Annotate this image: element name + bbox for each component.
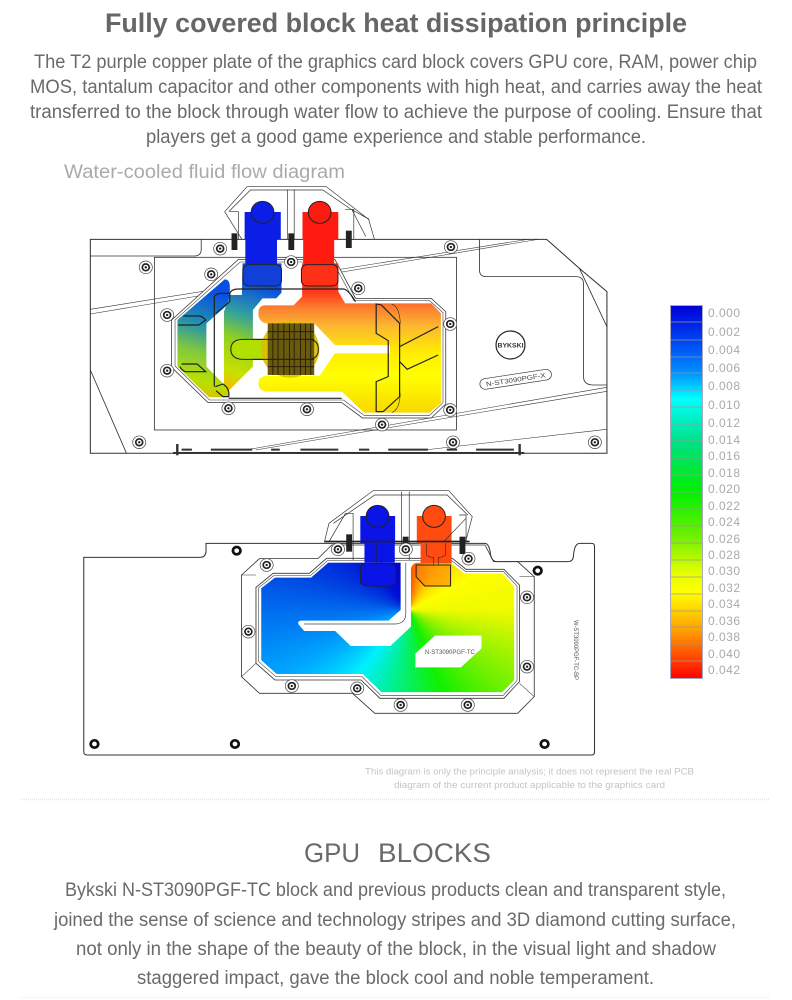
side model marking: W-ST3090PGF-TC-BP	[572, 620, 579, 680]
legend labels: 0.016	[708, 449, 741, 463]
brand logo	[496, 331, 525, 359]
card outline	[84, 543, 595, 755]
inlet connector: blue	[360, 505, 396, 586]
section paragraph: joined the sense of science and technology stripes and 3D diamond cutting surface,	[53, 910, 736, 931]
bottom bracket	[173, 444, 524, 455]
terminal bolts	[325, 534, 470, 554]
legend labels: 0.012	[708, 416, 741, 430]
legend labels: 0.028	[708, 548, 741, 562]
legend labels: 0.030	[708, 564, 741, 578]
fluid region	[261, 562, 514, 692]
screws	[133, 241, 601, 449]
title: Fully covered block heat dissipation principle	[105, 8, 687, 38]
screws	[91, 543, 548, 748]
section paragraph	[53, 880, 736, 989]
footnote: This diagram is only the principle analysis; it does not represent the real PCB	[365, 766, 694, 776]
footnote	[365, 766, 694, 790]
legend labels: 0.024	[708, 515, 741, 529]
slot line	[304, 563, 406, 624]
legend labels: 0.010	[708, 398, 741, 412]
legend color bar	[670, 306, 702, 678]
outlet connector: red	[301, 201, 338, 286]
intro paragraph	[30, 52, 763, 148]
brand logo: BYKSKI	[498, 343, 524, 350]
legend labels: 0.020	[708, 482, 741, 496]
legend labels: 0.038	[708, 630, 741, 644]
section paragraph: staggered impact, gave the block cool and noble temperament.	[137, 968, 654, 989]
section paragraph: not only in the shape of the beauty of the block, in the visual light and shadow	[76, 939, 716, 960]
card outline	[90, 239, 607, 453]
legend labels: 0.036	[708, 614, 741, 628]
center nub and fins	[231, 321, 319, 378]
fluid right channel	[258, 263, 441, 413]
outlet connector: orange	[416, 505, 452, 586]
footnote: diagram of the current product applicable to the graphics card	[394, 780, 665, 790]
legend labels: 0.002	[708, 325, 741, 339]
section heading	[304, 838, 491, 868]
legend labels: 0.000	[708, 306, 741, 320]
gasket outline	[242, 545, 534, 713]
legend labels: 0.014	[708, 433, 741, 447]
legend labels: 0.040	[708, 647, 741, 661]
legend labels: 0.022	[708, 499, 741, 513]
intro paragraph: The T2 purple copper plate of the graphics card block covers GPU core, RAM, power chip	[34, 52, 757, 73]
model plate	[479, 369, 552, 390]
gasket outline	[172, 259, 446, 418]
model plate: N-ST3090PGF-X	[486, 372, 547, 388]
fluid left channel	[177, 279, 230, 397]
diagram: back of block flow	[84, 491, 595, 755]
legend labels: 0.042	[708, 663, 741, 677]
block internal outlines	[178, 289, 438, 413]
inlet connector: blue	[243, 201, 281, 286]
intro paragraph: MOS, tantalum capacitor and other components with high heat, and carries away the heat	[30, 77, 763, 98]
legend labels: 0.018	[708, 466, 741, 480]
fluid middle channel	[224, 263, 281, 391]
terminal top outline	[225, 187, 374, 239]
model label on fluid island: N-ST3090PGF-TC	[425, 649, 475, 656]
intro paragraph: transferred to the block through water flow to achieve the purpose of cooling. Ensure that	[30, 102, 763, 123]
legend labels: 0.004	[708, 343, 741, 357]
intro paragraph: players get a good game experience and stable performance.	[146, 127, 646, 148]
legend labels: 0.006	[708, 361, 741, 375]
legend labels: 0.026	[708, 532, 741, 546]
terminal bolts	[232, 231, 352, 250]
legend labels: 0.008	[708, 379, 741, 393]
diagram subtitle: Water-cooled fluid flow diagram	[64, 162, 345, 183]
legend labels: 0.034	[708, 597, 741, 611]
section heading: GPU	[304, 838, 360, 868]
terminal top outline	[324, 491, 472, 560]
section heading: BLOCKS	[378, 838, 491, 868]
diagram: front of block flow	[90, 187, 607, 455]
section paragraph: Bykski N-ST3090PGF-TC block and previous products clean and transparent style,	[65, 880, 726, 901]
legend labels: 0.032	[708, 581, 741, 595]
legend labels	[708, 306, 741, 677]
